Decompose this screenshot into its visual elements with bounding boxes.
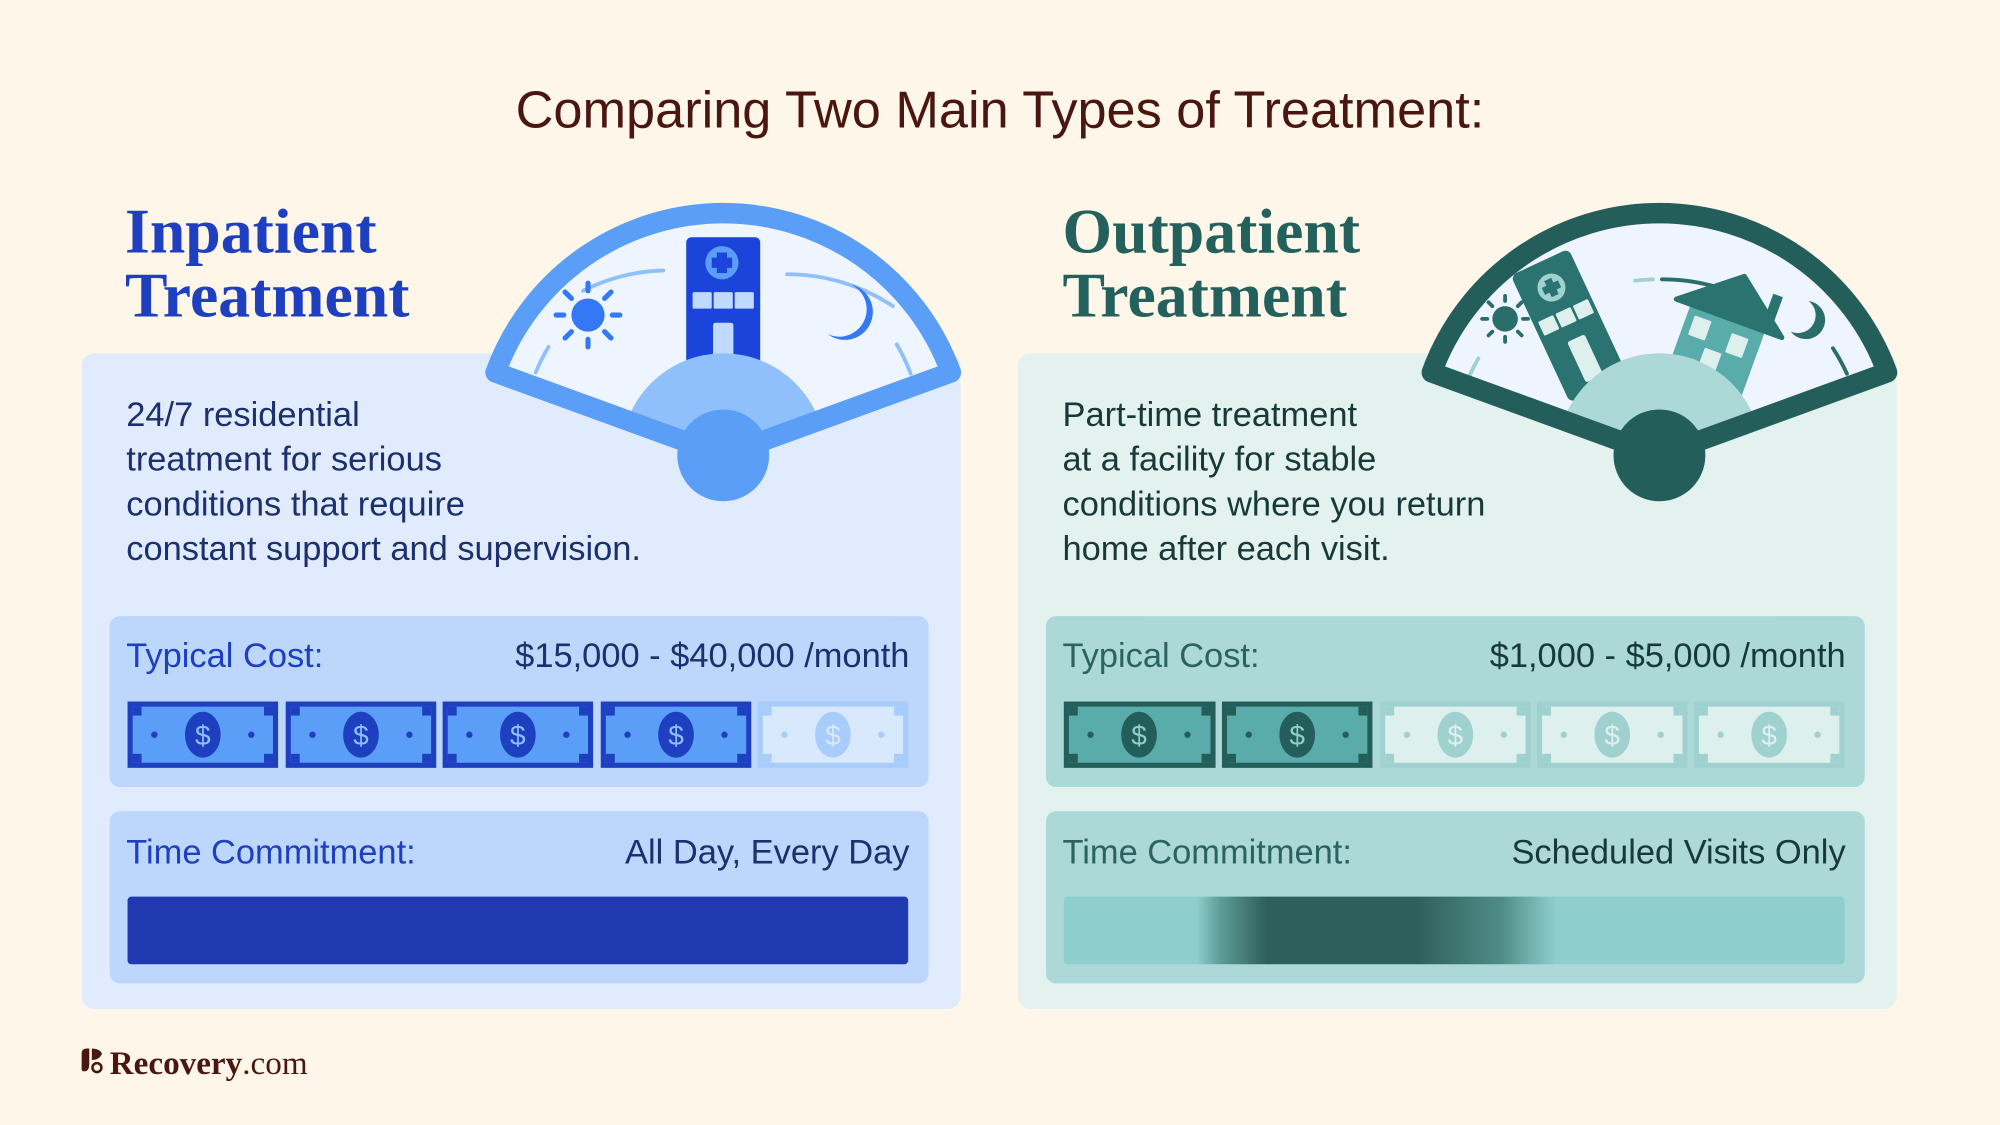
bills: outpatient: $ [1604, 720, 1620, 751]
gauge: inpatient [496, 213, 951, 557]
bills: inpatient: $ [668, 720, 684, 751]
bills: inpatient: $ [195, 720, 211, 751]
description: outpatient: home after each visit. [1062, 530, 1390, 568]
box: inpatient time: Time Commitment: [126, 834, 416, 872]
bills: outpatient: $ [1448, 720, 1464, 751]
box: outpatient time: Scheduled Visits Only [1511, 834, 1846, 872]
icon: house tilted [1648, 257, 1797, 415]
heading: inpatient: Inpatient [125, 196, 377, 267]
box: inpatient cost: Typical Cost: [126, 637, 323, 675]
bills: inpatient: $ [510, 720, 526, 751]
logo: Recovery.com [110, 1045, 308, 1082]
bills: inpatient: $ [353, 720, 369, 751]
description: inpatient: conditions that require [126, 485, 465, 523]
icon: moon [828, 284, 873, 340]
description: inpatient: treatment for serious [126, 441, 442, 479]
bills: outpatient: $ [1289, 720, 1305, 751]
box: inpatient time [110, 811, 929, 983]
panel: inpatient [82, 196, 960, 1009]
bills: inpatient [128, 702, 908, 768]
bills: outpatient: $ [1761, 720, 1777, 751]
bills: outpatient: $ [1131, 720, 1147, 751]
icon: sun [556, 283, 620, 347]
icon: moon [1791, 301, 1825, 339]
box: inpatient cost [110, 616, 929, 787]
box: outpatient cost: Typical Cost: [1062, 637, 1260, 675]
description: outpatient: conditions where you return [1062, 485, 1485, 523]
bar: inpatient time [128, 897, 908, 964]
heading: outpatient: Treatment [1062, 259, 1347, 330]
icon: hospital tilted [1511, 249, 1628, 403]
box: outpatient cost: $1,000 - $5,000 /month [1490, 637, 1846, 675]
description: outpatient: Part-time treatment [1062, 396, 1358, 434]
heading: inpatient: Treatment [125, 259, 409, 330]
box: outpatient time [1046, 811, 1865, 983]
description: inpatient: 24/7 residential [126, 396, 360, 434]
description: inpatient: constant support and supervision. [126, 530, 641, 568]
box: inpatient time: All Day, Every Day [625, 834, 910, 872]
title: Comparing Two Main Types of Treatment: [516, 82, 1484, 140]
box: outpatient time: Time Commitment: [1062, 834, 1352, 872]
bar: outpatient time [1064, 897, 1844, 964]
box: outpatient cost [1046, 616, 1865, 787]
description: outpatient: at a facility for stable [1062, 441, 1376, 479]
gauge: outpatient [1432, 213, 1887, 557]
heading: outpatient: Outpatient [1062, 196, 1360, 267]
bills: outpatient [1064, 702, 1844, 768]
icon: hospital [686, 237, 760, 378]
box: inpatient cost: $15,000 - $40,000 /month [515, 637, 909, 675]
icon: sun [1482, 296, 1528, 342]
panel: outpatient [1018, 196, 1897, 1009]
bills: inpatient: $ [825, 720, 841, 751]
